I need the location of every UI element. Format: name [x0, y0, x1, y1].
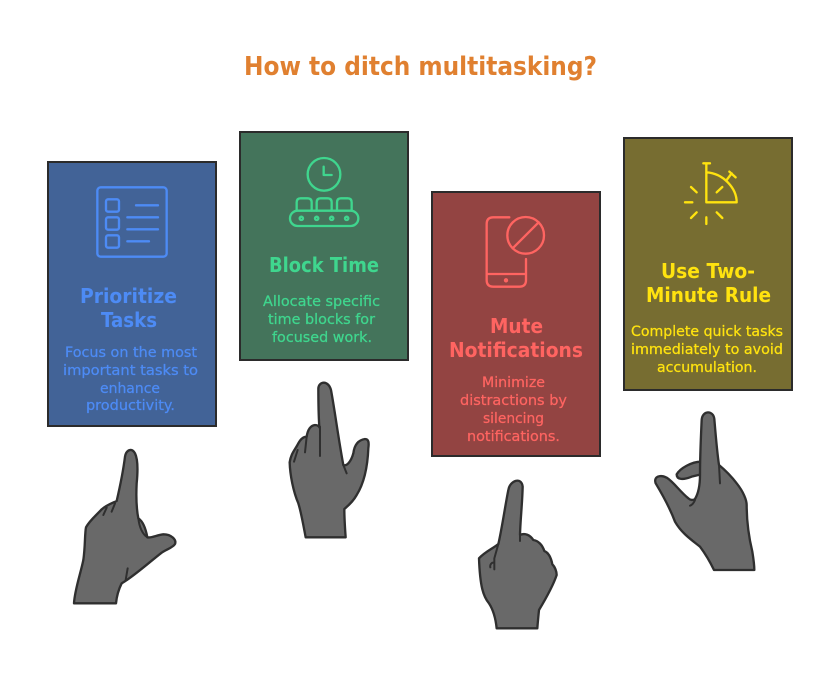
- text: prioritize description: productivity.: [86, 398, 175, 414]
- text: mute description: [460, 375, 567, 445]
- icon: checklist: [97, 187, 167, 257]
- card background: block time: [240, 132, 408, 360]
- card background: prioritize tasks: [48, 162, 216, 426]
- text: mute description: notifications.: [467, 429, 560, 445]
- text: two-minute description: immediately to avoid: [631, 342, 783, 358]
- text: prioritize description: [63, 345, 198, 414]
- text: block time description: time blocks for: [268, 312, 375, 328]
- icon: pointing hand 1: [74, 450, 175, 603]
- text: prioritize description: important tasks to: [63, 363, 198, 379]
- icon: phone with prohibited sign: [487, 217, 544, 287]
- card background: mute notifications: [432, 192, 600, 456]
- text: two-minute description: accumulation.: [657, 360, 757, 376]
- text: block time description: focused work.: [272, 330, 372, 346]
- text: mute description: silencing: [483, 411, 544, 427]
- text: block time description: [263, 294, 380, 346]
- title: How to ditch multitasking?: [244, 52, 597, 82]
- heading: prioritize tasks: Tasks: [101, 308, 157, 332]
- heading: two-minute rule: [646, 259, 771, 307]
- card background: two-minute rule: [624, 138, 792, 390]
- icon: stopwatch: [685, 163, 737, 224]
- heading: two-minute rule: Use Two-: [661, 259, 755, 283]
- text: two-minute description: Complete quick tasks: [631, 324, 783, 340]
- heading: prioritize tasks: [80, 284, 177, 332]
- icon: pointing hand 2: [290, 383, 369, 537]
- text: mute description: distractions by: [460, 393, 567, 409]
- heading: mute notifications: [449, 314, 583, 362]
- heading: mute notifications: Notifications: [449, 338, 583, 362]
- heading: two-minute rule: Minute Rule: [646, 283, 771, 307]
- panel: prioritize tasks: [48, 162, 216, 426]
- panel: block time: [240, 132, 408, 360]
- panel: mute notifications: [432, 192, 600, 456]
- text: mute description: Minimize: [482, 375, 545, 391]
- text: prioritize description: Focus on the most: [65, 345, 198, 361]
- text: block time description: Allocate specific: [263, 294, 380, 310]
- icon: pointing hand 3: [479, 481, 557, 628]
- text: two-minute description: [631, 324, 783, 376]
- icon: clock over conveyor: [290, 158, 358, 226]
- heading: prioritize tasks: Prioritize: [80, 284, 177, 308]
- icon: pointing hand 4: [655, 412, 754, 570]
- panel: two-minute rule: [624, 138, 792, 390]
- heading: mute notifications: Mute: [490, 314, 543, 338]
- heading: block time: Block Time: [269, 253, 379, 277]
- text: prioritize description: enhance: [100, 381, 160, 397]
